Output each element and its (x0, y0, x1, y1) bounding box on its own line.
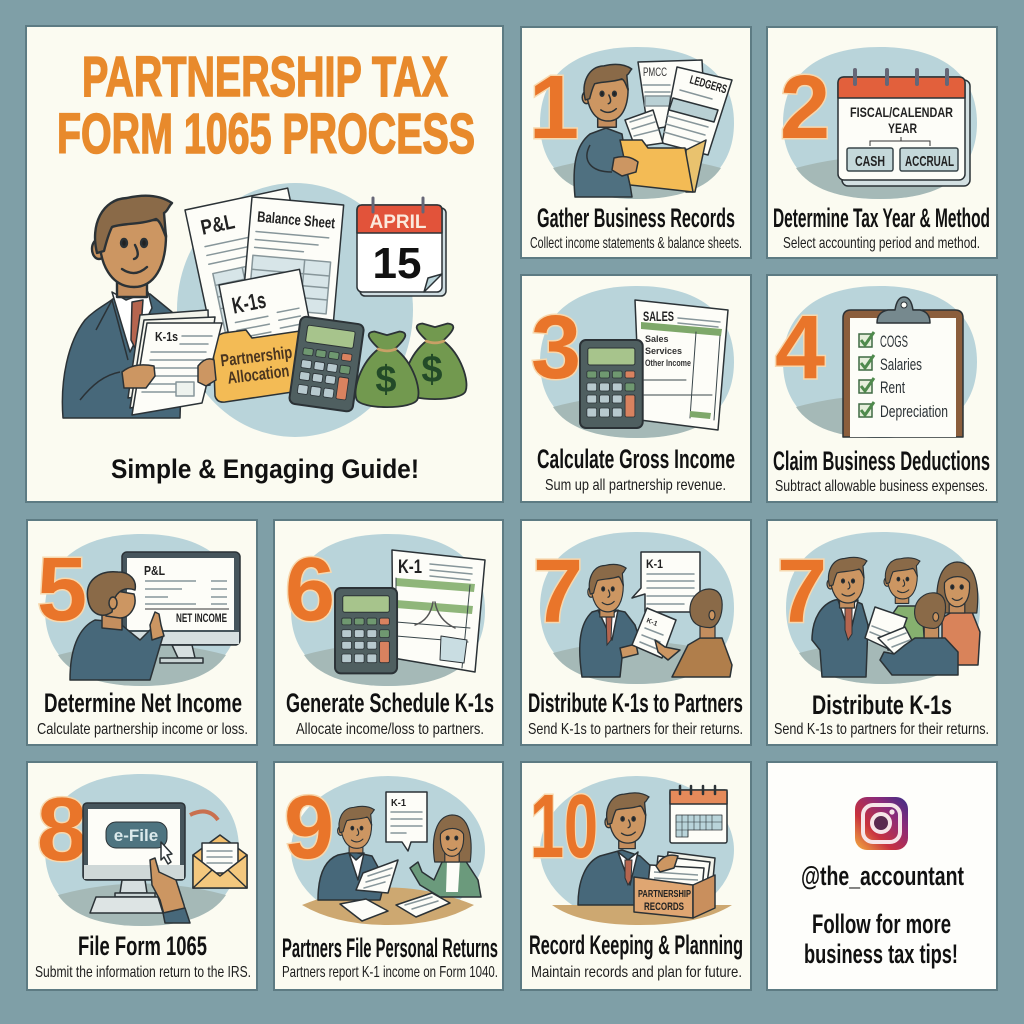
heading: Distribute K-1s (812, 690, 952, 720)
backdrop (786, 532, 980, 684)
document: Ledgers: LEDGERS (688, 72, 729, 96)
description: Sum up all partnership revenue. (545, 477, 726, 494)
receiving partner (655, 589, 732, 677)
backdrop (540, 532, 734, 684)
backdrop (783, 47, 977, 199)
man partner (318, 806, 385, 900)
person in sweater (574, 64, 632, 197)
money bags: $ (421, 349, 443, 391)
document: Ledgers (662, 67, 732, 155)
calendar: fiscal year and method: FISCAL/CALENDAR (850, 104, 953, 120)
envelope (193, 835, 247, 888)
records box with files: RECORDS (644, 901, 684, 913)
heading: Determine Net Income (44, 688, 242, 718)
records box with files (634, 852, 715, 918)
monitor with e-File button: e-File (114, 826, 158, 845)
folder (620, 140, 706, 192)
backdrop (540, 47, 734, 199)
accountant handing document (580, 564, 640, 677)
title: FORM 1065 PROCESS (57, 102, 475, 166)
papers on table (340, 893, 450, 921)
call to action: Follow for more (812, 909, 951, 939)
keyboard (90, 897, 163, 913)
clipboard checklist: COGS (880, 332, 908, 351)
description: Collect income statements & balance sheets. (530, 235, 742, 252)
document: P&L: P&L (199, 210, 237, 240)
number 6: 6 (285, 540, 335, 640)
calendar: fiscal year and method (838, 70, 970, 186)
handed document (632, 608, 676, 658)
money bags: $ (375, 359, 397, 401)
number 10: 10 (530, 777, 598, 877)
heading: File Form 1065 (78, 931, 207, 961)
number 1: 1 (529, 58, 579, 158)
icon: instagram (855, 797, 908, 850)
clipboard checklist: Rent (880, 378, 905, 397)
number 8: 8 (37, 780, 87, 880)
schedule K-1 document: K-1 (398, 557, 422, 578)
clipboard checklist (843, 297, 963, 437)
handed document: K-1 (645, 617, 658, 628)
document: PMCC (638, 60, 705, 130)
heading: Distribute K-1s to Partners (528, 688, 743, 718)
panel: step 9 (274, 762, 503, 990)
document: sales: SALES (643, 308, 674, 324)
calendar: fiscal year and method: CASH (855, 153, 885, 170)
title: PARTNERSHIP TAX (82, 45, 448, 109)
calendar: fiscal year and method: YEAR (888, 120, 917, 136)
partner seen from behind (880, 593, 958, 675)
document: P&L (185, 188, 316, 342)
panel: step 5 (27, 520, 257, 745)
records box with files: PARTNERSHIP (638, 889, 691, 900)
calendar: April 15 (357, 198, 446, 296)
number 9: 9 (284, 778, 334, 878)
heading: Record Keeping & Planning (529, 930, 743, 960)
panel: step 6 (274, 520, 503, 745)
number 2: 2 (780, 58, 830, 158)
number 5: 5 (37, 540, 87, 640)
heading: Generate Schedule K-1s (286, 688, 494, 718)
document in hand (356, 860, 398, 893)
monitor with P&L (122, 552, 240, 663)
panel: step 10 (521, 762, 751, 990)
folder: Partnership Allocation: Partnership (219, 343, 293, 370)
folder: Partnership Allocation (213, 330, 306, 402)
document: sales (635, 300, 728, 430)
accountant figure (62, 196, 182, 418)
description: Partners report K-1 income on Form 1040. (282, 964, 498, 981)
heading: Partners File Personal Returns (282, 933, 498, 963)
monitor with P&L: P&L (144, 563, 165, 578)
clipboard checklist: Depreciation (880, 402, 948, 421)
document: K-1s: K-1s (230, 287, 268, 319)
speech bubble K-1: K-1 (391, 798, 406, 809)
panel: hero (26, 26, 503, 502)
desk (552, 905, 732, 925)
number 7: 7 (533, 542, 583, 642)
folder: Partnership Allocation: Allocation (226, 361, 290, 388)
table (302, 888, 474, 925)
backdrop (540, 776, 734, 924)
panel: step 2 (767, 27, 997, 258)
illustration backdrop circle (177, 183, 413, 437)
handle: @the_accountant (801, 861, 964, 891)
hand (612, 157, 638, 176)
calendar: April 15: 15 (373, 239, 421, 288)
speech bubble K-1 (632, 552, 700, 612)
backdrop (45, 534, 239, 686)
panel: step 7 to partners (521, 520, 751, 745)
description: Maintain records and plan for future. (531, 964, 742, 981)
calculator (580, 340, 643, 428)
backdrop (783, 286, 977, 438)
accountant (812, 557, 868, 677)
backdrop (45, 774, 239, 926)
document: Balance Sheet (242, 197, 344, 323)
person filing (578, 793, 660, 905)
calculator (335, 588, 397, 673)
backdrop (291, 776, 485, 924)
small document (625, 110, 663, 147)
hand pressing (150, 858, 190, 923)
person pointing at screen (70, 572, 164, 680)
number 4: 4 (775, 298, 825, 398)
description: Send K-1s to partners for their returns. (528, 721, 743, 738)
document: sales: Other Income (645, 358, 691, 368)
accountant hands (122, 359, 216, 388)
monitor with e-File button (83, 803, 185, 897)
calendar: April 15: APRIL (370, 212, 427, 233)
K-1s paper stack held by accountant (128, 310, 222, 415)
monitor with P&L: NET INCOME (176, 611, 227, 625)
subtitle: Simple & Engaging Guide! (111, 454, 419, 484)
arrow to envelope (190, 811, 218, 820)
woman partner (937, 562, 980, 665)
money bags (356, 324, 466, 407)
panel: follow (767, 762, 997, 990)
speech bubble K-1: K-1 (646, 557, 663, 571)
description: Calculate partnership income or loss. (37, 721, 248, 738)
K-1s paper stack held by accountant: K-1s (155, 329, 178, 344)
backdrop (540, 286, 734, 438)
schedule K-1 document (392, 550, 485, 672)
panel: step 1 (521, 27, 751, 258)
heading: Calculate Gross Income (537, 444, 735, 474)
description: Submit the information return to the IRS. (35, 964, 251, 981)
speech bubble K-1 (386, 792, 427, 851)
number 7: 7 (777, 542, 827, 642)
number 3: 3 (531, 298, 581, 398)
panel: step 8 (27, 762, 257, 990)
document: sales: Services (645, 346, 682, 356)
panel: step 4 (767, 275, 997, 502)
calendar: fiscal year and method: ACCRUAL (905, 153, 954, 170)
heading: Gather Business Records (537, 203, 735, 233)
title (57, 45, 475, 166)
document: Balance Sheet: Balance Sheet (257, 209, 336, 232)
woman partner (410, 815, 481, 897)
call to action (804, 909, 958, 969)
backdrop (291, 534, 485, 686)
calendar (670, 786, 727, 843)
calculator (289, 316, 364, 412)
description: Allocate income/loss to partners. (296, 721, 484, 738)
panel: step 7 distribute (767, 520, 997, 745)
document: K-1s (219, 269, 314, 360)
document: PMCC: PMCC (643, 65, 667, 79)
clipboard checklist: Salaries (880, 355, 922, 374)
documents (865, 607, 918, 662)
green shirt partner (884, 558, 925, 650)
document: sales: Sales (645, 334, 669, 344)
panel: step 3 (521, 275, 751, 502)
